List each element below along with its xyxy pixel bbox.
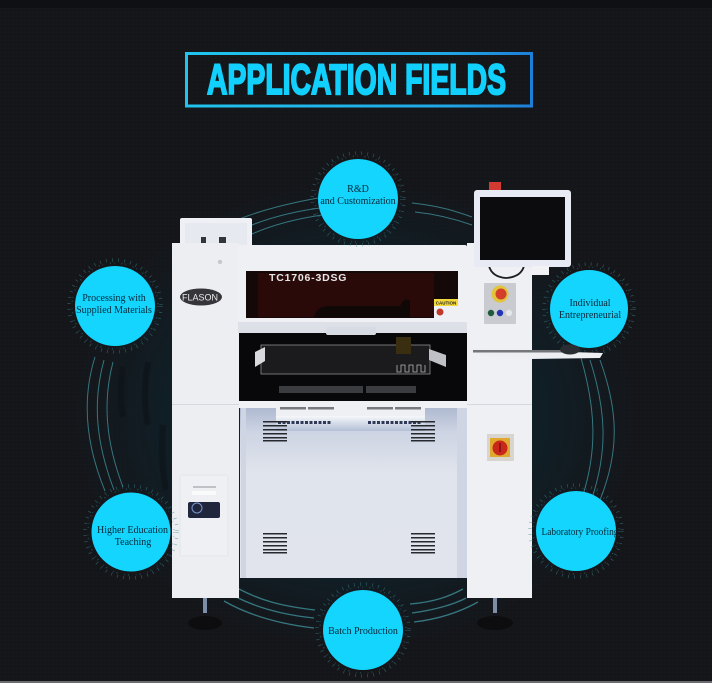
title box <box>186 54 532 106</box>
gauge box <box>180 475 228 556</box>
machine <box>172 182 571 630</box>
title: APPLICATION FIELDS <box>207 56 506 104</box>
carriage <box>276 401 425 431</box>
logo: FLASON <box>182 292 218 302</box>
circle: R&D: and Customization <box>320 196 396 207</box>
top centre hood <box>238 245 467 335</box>
circle: laboratory <box>530 485 622 577</box>
lower centre panel <box>240 404 468 578</box>
circle: higher education <box>85 486 177 578</box>
circle: laboratory: Laboratory Proofing <box>542 527 618 538</box>
circle: higher education: Teaching <box>115 537 151 548</box>
window <box>246 271 458 318</box>
circle: individual <box>544 264 634 354</box>
left column <box>172 243 239 598</box>
monitor arm <box>489 266 524 278</box>
beacon <box>489 182 501 190</box>
model label: TC1706-3DSG <box>269 272 347 284</box>
circle: individual: Individual <box>569 298 611 309</box>
circle: R&D <box>312 153 404 245</box>
circle: supplied materials <box>69 260 161 352</box>
circle: supplied materials: Processing with <box>82 293 146 304</box>
caution sticker <box>434 299 458 318</box>
concentric ring arcs <box>87 198 614 628</box>
circle: batch production <box>317 584 409 676</box>
circle: R&D: R&D <box>347 184 369 195</box>
vents <box>263 421 435 554</box>
logo <box>180 288 222 306</box>
right column <box>467 243 532 598</box>
top left tray <box>180 218 252 248</box>
keyboard shelf <box>470 344 603 359</box>
control panel <box>484 283 516 324</box>
circle: batch production: Batch Production <box>328 626 398 637</box>
circle: higher education: Higher Education <box>97 525 168 536</box>
circle: individual: Entrepreneurial <box>559 310 621 321</box>
circle: supplied materials: Supplied Materials <box>76 305 152 316</box>
main switch <box>487 434 514 461</box>
caution sticker: CAUTION <box>436 300 456 306</box>
handle <box>326 327 376 335</box>
central dark cavity <box>238 332 468 404</box>
monitor <box>474 182 571 275</box>
feet <box>188 598 513 630</box>
